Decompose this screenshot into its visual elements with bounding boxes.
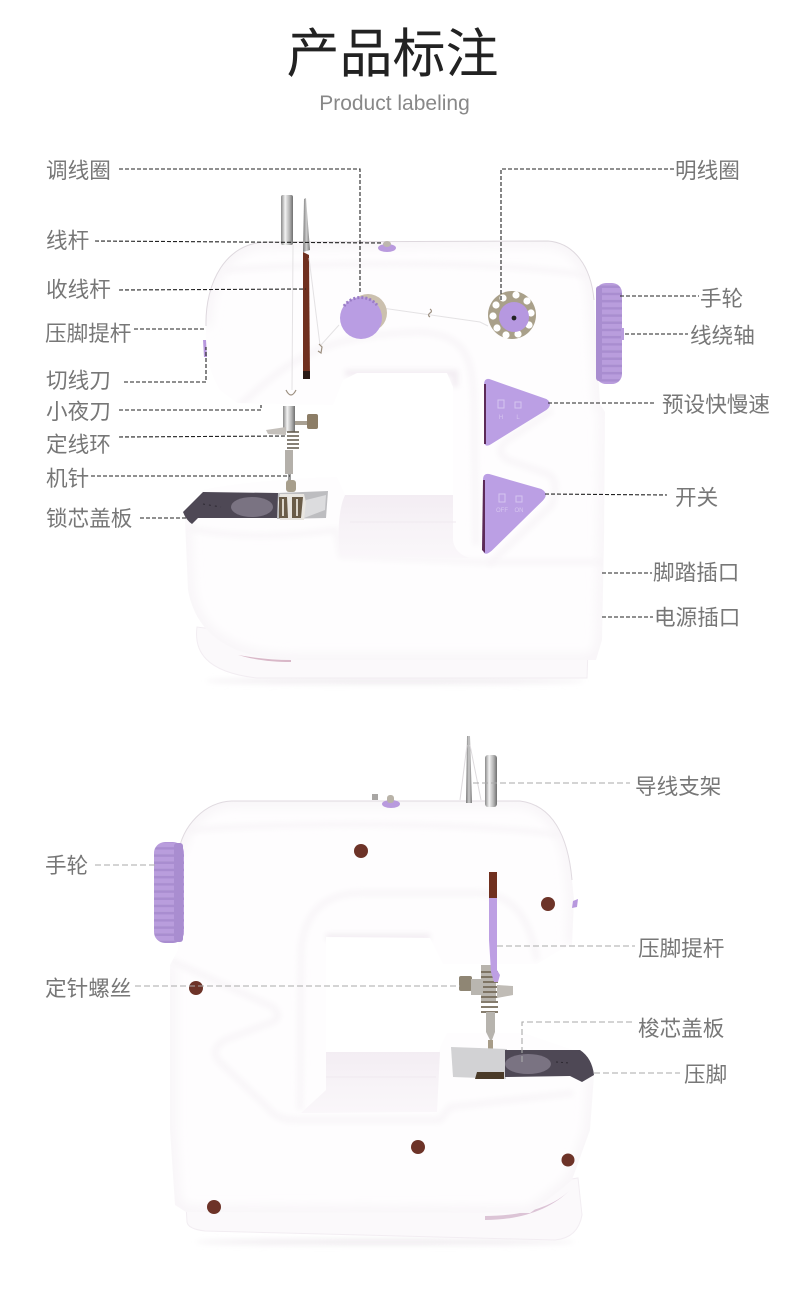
threads	[292, 245, 488, 390]
callout: 电源插口	[602, 605, 740, 630]
take-up slot and lever	[489, 872, 500, 982]
callout: 定针螺丝: 定针螺丝	[45, 976, 131, 1001]
callout: 小夜刀	[46, 399, 261, 424]
head outline	[206, 241, 594, 326]
power button: ON	[514, 508, 524, 514]
callout: 预设快慢速: 预设快慢速	[662, 392, 770, 417]
callout: 切线刀	[46, 347, 206, 393]
presser foot	[278, 494, 306, 520]
callout: 定线环: 定线环	[46, 432, 111, 457]
hand wheel	[154, 842, 184, 943]
presser assembly	[459, 965, 513, 1062]
needle plate	[277, 491, 328, 519]
recessed shelf	[301, 1052, 440, 1113]
main body	[185, 241, 605, 660]
speed button	[484, 380, 549, 445]
speed button: L	[516, 415, 520, 421]
callout: 手轮	[620, 286, 743, 311]
lever nub	[572, 899, 578, 908]
power button: OFF	[496, 508, 508, 514]
callout: 线杆: 线杆	[46, 228, 89, 253]
base plate	[186, 1178, 582, 1240]
thread pin	[485, 755, 497, 807]
title: 产品标注	[286, 25, 498, 84]
callout: 明线圈	[501, 158, 740, 300]
needle plate	[451, 1047, 507, 1079]
body shading	[346, 370, 458, 386]
callout: 锁芯盖板: 锁芯盖板	[46, 506, 132, 531]
thread guide	[303, 198, 310, 252]
callout: 调线圈	[46, 158, 360, 293]
main body	[170, 801, 594, 1213]
shuttle cover	[505, 1050, 594, 1082]
callout: 手轮: 手轮	[700, 286, 743, 311]
callout: 切线刀: 切线刀	[46, 368, 111, 393]
callout: 机针: 机针	[46, 466, 89, 491]
callout: 线绕轴	[625, 323, 755, 348]
sewing machine: back view	[154, 736, 594, 1245]
top screw	[378, 241, 396, 252]
thread pin	[281, 195, 293, 245]
thread guide	[460, 736, 481, 803]
callout: 导线支架: 导线支架	[635, 774, 721, 799]
top screw	[372, 794, 400, 808]
body shading	[327, 934, 429, 938]
take-up slot	[303, 252, 310, 379]
callout: 开关: 开关	[675, 485, 718, 510]
speed button: H	[499, 415, 503, 421]
sewing machine: front view	[183, 195, 624, 684]
callout: 手轮 (back): 手轮	[45, 853, 88, 878]
callout: 压脚: 压脚	[684, 1062, 727, 1087]
callout: 压脚提杆: 压脚提杆	[45, 321, 131, 346]
callout: 线绕轴: 线绕轴	[690, 323, 755, 348]
callout: 电源插口: 电源插口	[654, 605, 740, 630]
presser foot	[475, 1072, 504, 1079]
callout: 脚踏插口: 脚踏插口	[653, 560, 739, 585]
bobbin spool	[488, 291, 536, 339]
callout: 明线圈: 明线圈	[675, 158, 740, 183]
power button	[482, 475, 545, 553]
screw holes	[189, 844, 574, 1214]
subtitle: Product labeling	[319, 92, 470, 115]
hand wheel	[596, 283, 624, 384]
lever nub	[203, 340, 207, 357]
bobbin cover	[183, 492, 278, 524]
pink base edge	[238, 655, 291, 662]
base plate	[197, 627, 588, 678]
recessed shelf	[339, 495, 470, 558]
callout: 小夜刀: 小夜刀	[46, 399, 111, 424]
head outline	[178, 801, 572, 880]
callout: 压脚提杆 (back): 压脚提杆	[638, 936, 724, 961]
callout: 收线杆: 收线杆	[46, 277, 111, 302]
thread hooks	[286, 309, 432, 395]
callout: 脚踏插口	[602, 560, 739, 585]
callout: 梭芯盖板: 梭芯盖板	[638, 1016, 724, 1041]
callout: 手轮 (back)	[45, 853, 155, 878]
callout: 压脚	[594, 1062, 727, 1087]
tension dial	[340, 294, 387, 339]
callout: 梭芯盖板	[522, 1016, 724, 1062]
callout: 调线圈: 调线圈	[46, 158, 111, 183]
needle assembly	[266, 406, 318, 492]
